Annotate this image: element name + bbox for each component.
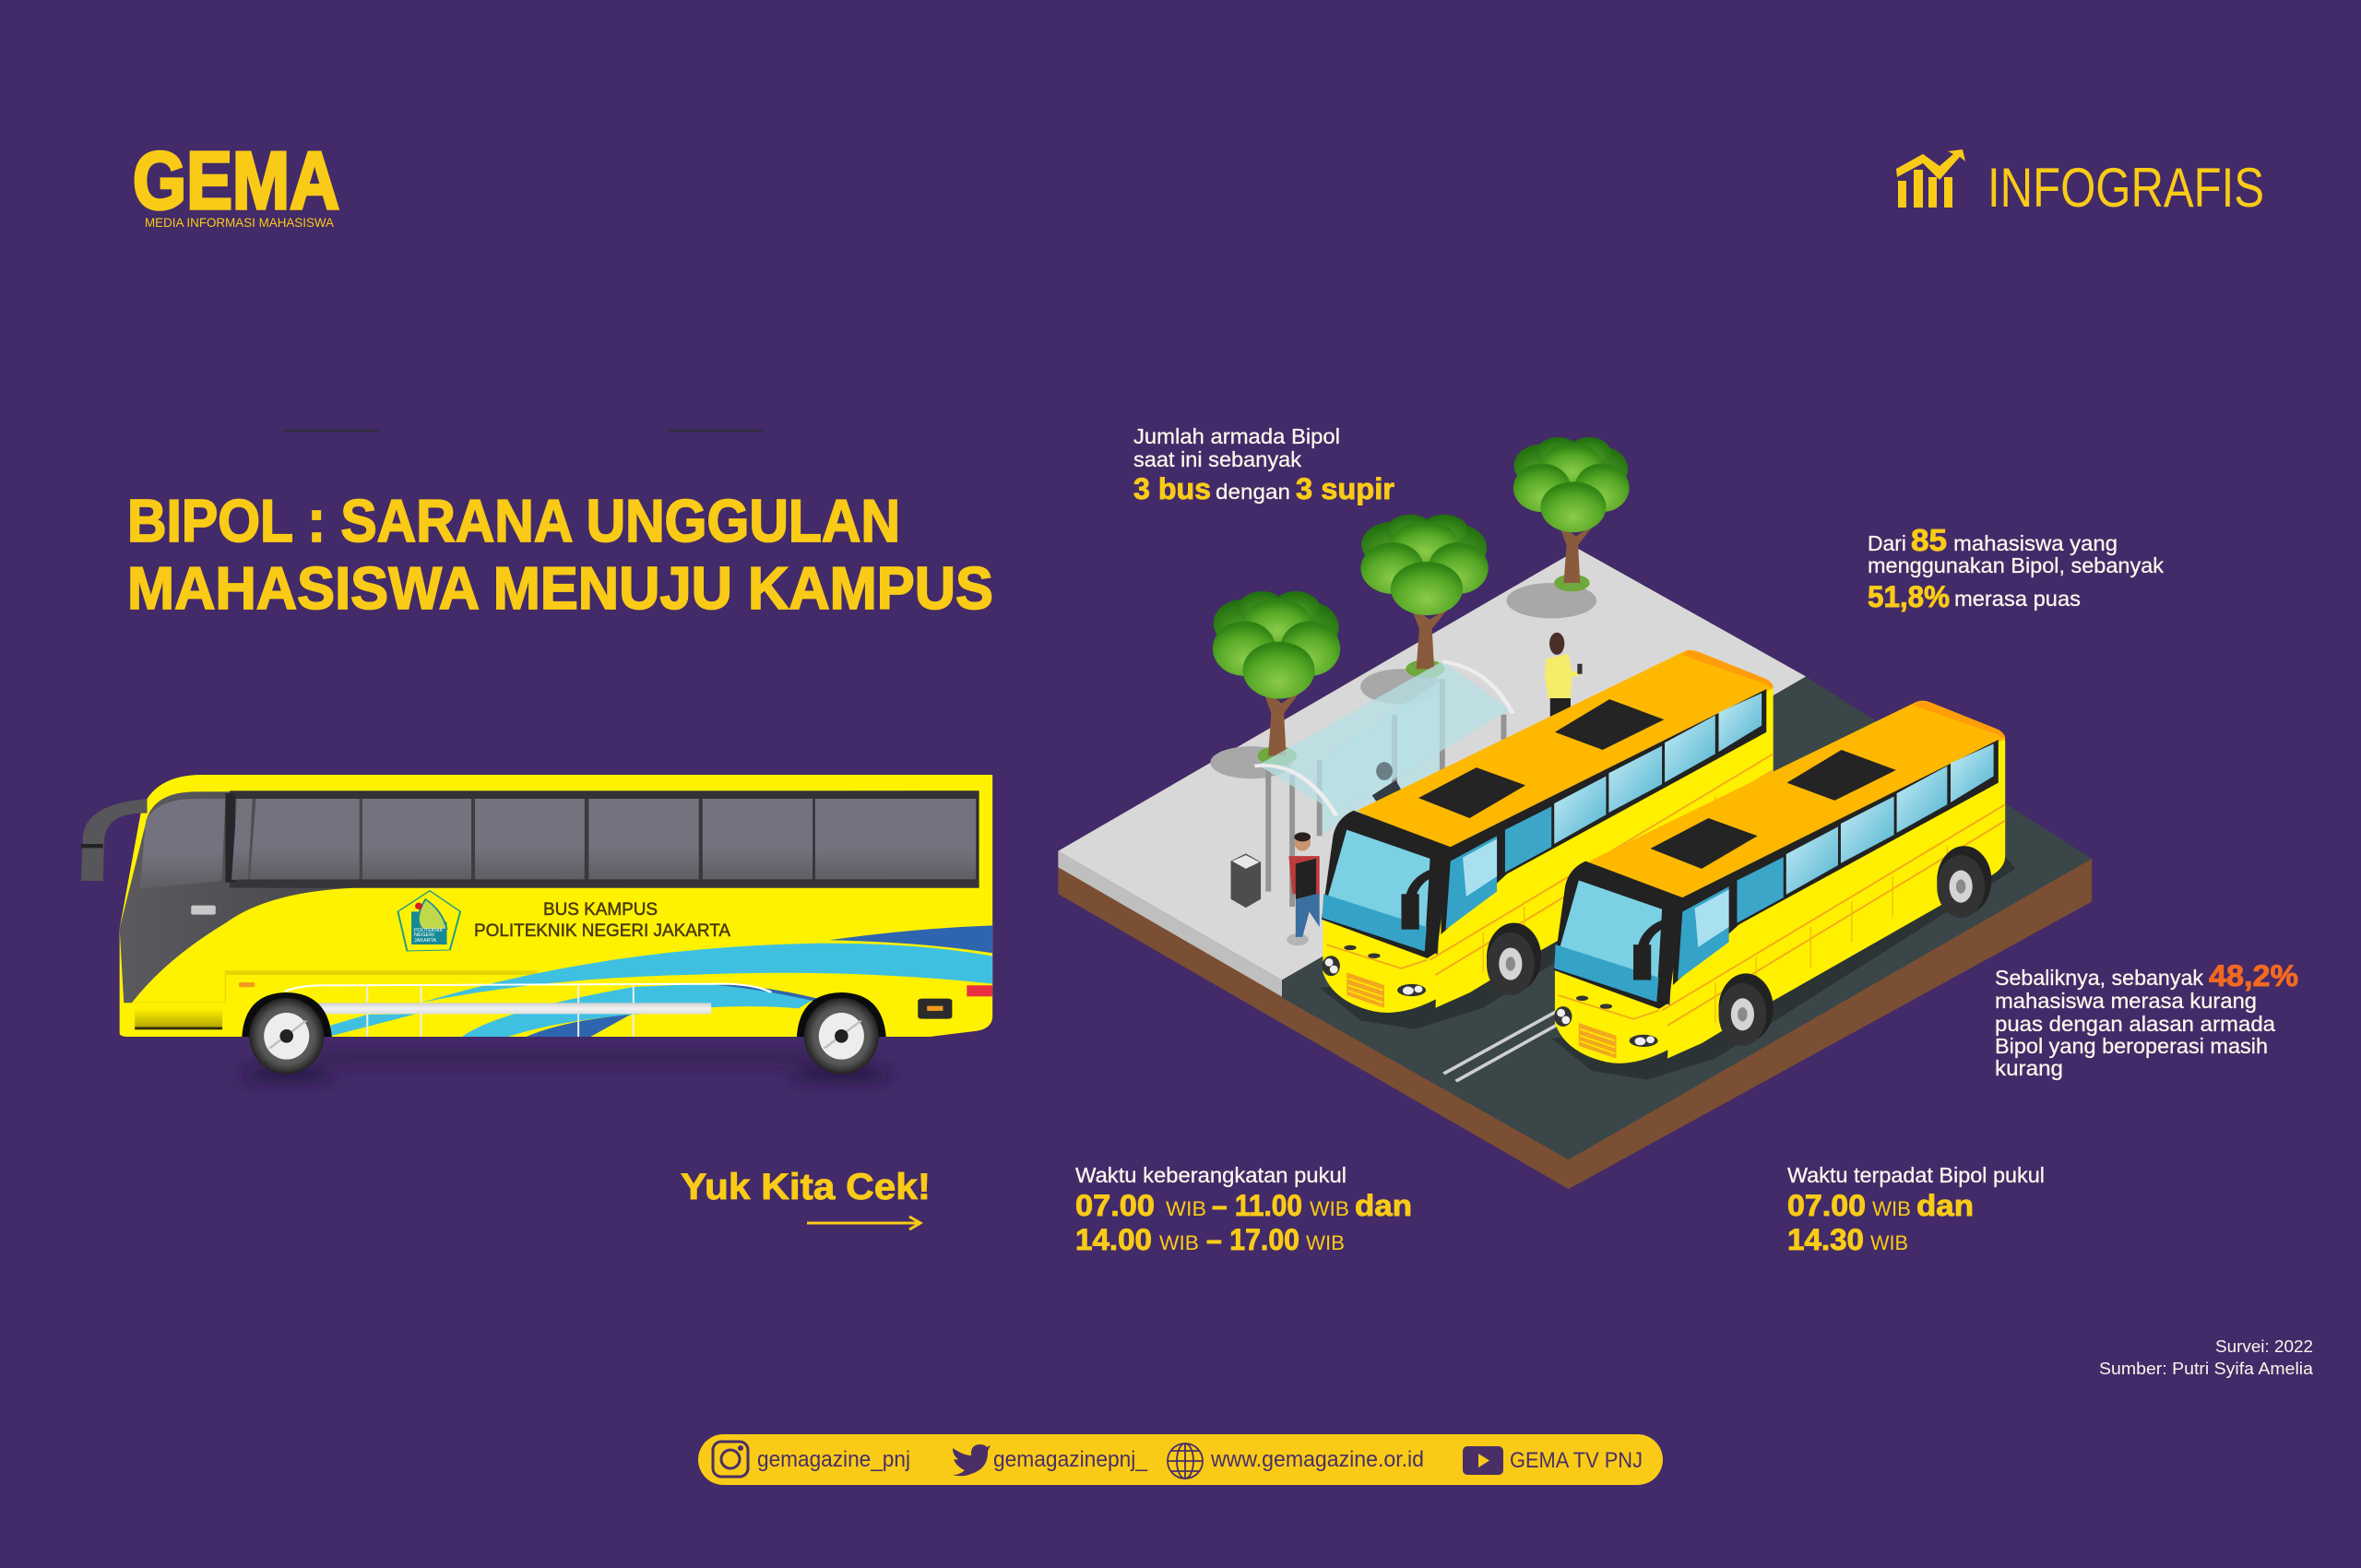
logo wordmark: GEMA — [133, 135, 339, 226]
title — [127, 487, 993, 622]
title: MAHASISWA MENUJU KAMPUS — [127, 554, 993, 622]
road — [1282, 676, 2092, 1159]
tree 3 — [1213, 591, 1340, 766]
bus artwork — [81, 775, 992, 1075]
text block: unsatisfied — [1995, 959, 2298, 1080]
source note: Survei: 2022 — [2215, 1337, 2313, 1356]
text block: departure times: – 17.00 — [1206, 1223, 1299, 1256]
text block: departure times: dan — [1355, 1189, 1412, 1222]
callout: Yuk Kita Cek — [681, 1167, 931, 1229]
standing passenger — [1287, 832, 1320, 945]
text block: busiest times: dan — [1916, 1189, 1974, 1222]
text block: busiest times: 07.00 — [1787, 1189, 1866, 1222]
text block: departure times: – 11.00 — [1212, 1189, 1302, 1222]
text block: satisfied: menggunakan Bipol, sebanyak — [1868, 553, 2165, 577]
twitter handle: gemagazinepnj_ — [993, 1447, 1148, 1472]
illustration: side view campus bus: POLITEKNIK NEGERI JAKARTA — [474, 921, 730, 941]
text block: fleet — [1133, 424, 1394, 505]
text block: busiest times: Waktu terpadat Bipol pukul — [1787, 1163, 2045, 1187]
luggage bay lines — [285, 984, 771, 992]
text block: departure times: WIB — [1306, 1231, 1345, 1254]
road markings — [1443, 1010, 1559, 1081]
footer social bar — [698, 1434, 1663, 1485]
text block: departure times: 14.00 — [1075, 1223, 1152, 1256]
infografis label: INFOGRAFIS — [1987, 157, 2264, 219]
text block: busiest times: WIB — [1870, 1231, 1908, 1254]
text block: unsatisfied: puas dengan alasan armada — [1995, 1012, 2275, 1036]
lights — [239, 982, 255, 987]
text block: satisfied: merasa puas — [1954, 587, 2081, 611]
sidewalk — [1058, 549, 1806, 980]
icon: instagram — [713, 1442, 748, 1477]
text block: fleet: dengan — [1216, 480, 1290, 504]
bus 2 — [1551, 701, 2015, 1080]
emblem lettering — [414, 928, 444, 944]
text block: satisfied: Dari — [1868, 531, 1906, 555]
text block: satisfied: mahasiswa yang — [1953, 531, 2118, 555]
text block: satisfied: 85 — [1911, 523, 1947, 557]
text block: unsatisfied: mahasiswa merasa kurang — [1995, 989, 2257, 1013]
rear wheel — [797, 992, 886, 1037]
text block: departure times: WIB — [1310, 1197, 1349, 1220]
text block: departure times: 07.00 — [1075, 1189, 1155, 1222]
emblem lettering: NEGERI — [414, 932, 434, 938]
text block: fleet: Jumlah armada Bipol — [1133, 424, 1340, 448]
source note: Sumber: Putri Syifa Amelia — [2099, 1360, 2314, 1378]
text block: fleet: 3 supir — [1296, 472, 1394, 505]
bus body — [120, 775, 992, 1037]
source note — [2099, 1337, 2314, 1378]
footer pill — [698, 1434, 1663, 1485]
icon: globe — [1168, 1443, 1203, 1479]
text block: unsatisfied: Bipol yang beroperasi masih — [1995, 1034, 2268, 1058]
text block: unsatisfied: Sebaliknya, sebanyak — [1995, 966, 2203, 990]
text block: departure times: WIB — [1166, 1197, 1206, 1220]
trash bin — [1231, 853, 1261, 908]
tree 1 — [1513, 437, 1630, 591]
icon: youtube — [1463, 1446, 1503, 1475]
text block: departure times — [1075, 1163, 1412, 1256]
bus lettering: BUS KAMPUS — [543, 900, 658, 920]
illustration: side view campus bus — [81, 775, 992, 1081]
instagram handle: gemagazine_pnj — [757, 1447, 910, 1472]
text block: fleet: 3 bus — [1133, 472, 1211, 505]
ground soil — [1058, 851, 2092, 1189]
side windows — [231, 799, 976, 880]
text block: satisfied — [1868, 523, 2165, 613]
title: BIPOL : SARANA UNGGULAN — [127, 487, 900, 554]
text block: unsatisfied: kurang — [1995, 1056, 2063, 1080]
website: www.gemagazine.or.id — [1210, 1447, 1424, 1472]
front wheel — [242, 992, 332, 1037]
icon: rising chart — [1896, 149, 1965, 208]
illustration: isometric bus stop — [1058, 437, 2092, 1189]
text block: departure times: Waktu keberangkatan pukul — [1075, 1163, 1347, 1187]
logo: GEMA — [133, 135, 339, 230]
youtube channel: GEMA TV PNJ — [1510, 1448, 1643, 1473]
text block: departure times: WIB — [1159, 1231, 1199, 1254]
text block: fleet: saat ini sebanyak — [1133, 447, 1301, 471]
icon: twitter — [953, 1444, 991, 1476]
mirror — [81, 799, 147, 881]
door handle — [191, 906, 216, 915]
side trim and swooshes — [225, 970, 538, 975]
heading: INFOGRAFIS — [1896, 149, 2264, 219]
emblem lettering: JAKARTA — [414, 938, 437, 944]
tree shadows — [1210, 583, 1596, 778]
windscreen — [140, 799, 225, 888]
sidewalk edge — [1058, 851, 1282, 997]
text block: busiest times: WIB — [1872, 1197, 1911, 1220]
dark window band — [120, 790, 979, 1003]
bus 1 — [1320, 650, 1784, 1029]
callout: Yuk Kita Cek: Yuk Kita Cek! — [681, 1167, 931, 1207]
seated passenger — [1372, 762, 1401, 803]
arrow — [807, 1217, 920, 1229]
text block: satisfied: 51,8% — [1868, 580, 1950, 613]
logo tagline: MEDIA INFORMASI MAHASISWA — [145, 215, 335, 230]
tree 2 — [1360, 515, 1489, 678]
text block: unsatisfied: 48,2% — [2209, 959, 2298, 992]
text block: busiest times: 14.30 — [1787, 1223, 1864, 1256]
bus shelter — [1254, 661, 1513, 907]
front vent — [135, 1008, 222, 1029]
bus ground shadow — [241, 1053, 892, 1081]
text block: busiest times — [1787, 1163, 2045, 1256]
emblem — [397, 891, 460, 951]
standing woman — [1545, 633, 1583, 717]
emblem lettering: POLITEKNIK — [414, 928, 444, 933]
